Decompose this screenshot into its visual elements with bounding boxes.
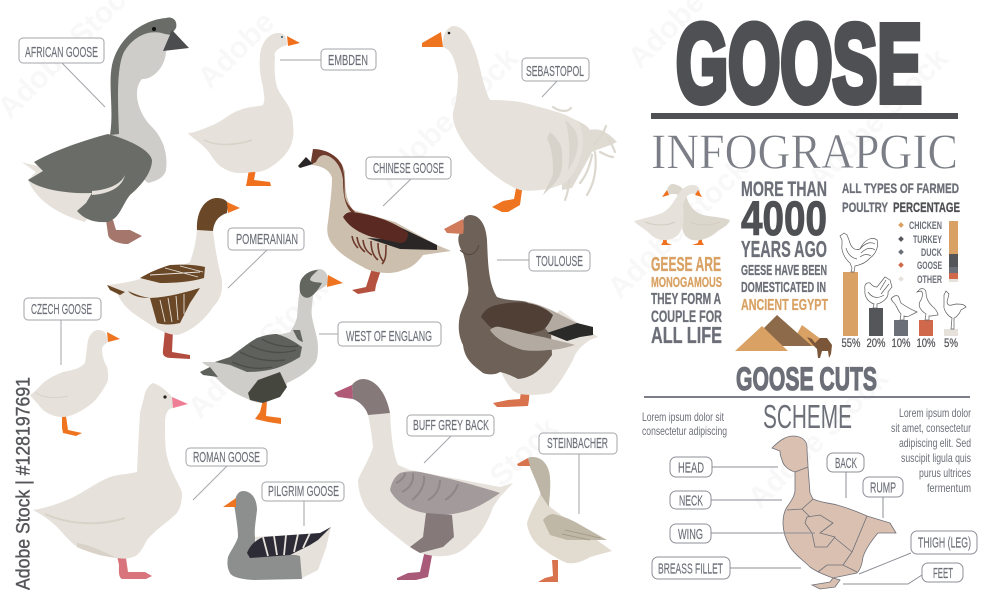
chart legend: OTHER [917,274,942,286]
text: more than 4000 years ago: DOMESTICATED IN [741,279,826,296]
text: more than 4000 years ago: ANCIENT EGYPT [741,297,828,314]
icon: pyramids and camel [735,315,832,358]
bar chart: poultry share: 55% [842,336,861,350]
label: Buff grey back [407,415,494,463]
section rule [644,396,970,398]
text: lorem right: suscipit ligula quis [901,451,971,465]
label: African goose [19,38,105,107]
label: Pilgrim goose: PILGRIM GOOSE [268,483,339,500]
callout: head: HEAD [678,460,704,476]
goose: Pomeranian [107,198,240,359]
text: lorem right: Lorem ipsum dolor [899,406,971,420]
label: Roman goose: ROMAN GOOSE [193,449,260,466]
label: Steinbacher [539,433,617,514]
callout: back: BACK [835,455,857,472]
chart legend [898,220,942,286]
text: more than 4000 years ago: MORE THAN [741,178,827,201]
label: Embden: EMBDEN [328,52,368,69]
callout: head [670,457,778,477]
goose: Steinbacher [517,457,612,582]
stock watermarks: Adobe Stock [182,272,335,425]
goose: Embden [188,33,300,186]
label: Chinese goose [366,157,451,206]
callout: breast fillet [652,557,801,579]
label: Pomeranian [228,228,304,288]
text: lorem right: purus ultrices [919,466,971,480]
goose: Toulouse [444,215,598,407]
bar chart: poultry share: 10% [892,336,911,350]
bar chart: poultry share: 20% [866,336,886,350]
text: lorem right [891,406,971,495]
label: Toulouse [497,250,590,271]
callouts: goose cuts [652,453,977,584]
text: geese are monogamous: GEESE ARE [651,254,721,276]
label: African goose: AFRICAN GOOSE [25,44,98,61]
text: more than 4000 years ago: GEESE HAVE BEEN [741,262,827,279]
text: lorem left: Lorem ipsum dolor sit [642,410,724,424]
icons: poultry line drawings [840,233,966,329]
text: more than 4000 years ago: YEARS AGO [741,236,827,262]
label: Chinese goose: CHINESE GOOSE [373,160,444,177]
text: lorem right: adipiscing elit. Sed [899,436,971,450]
heading: poultry percentage: PERCENTAGE [893,199,960,215]
bar chart: poultry share: 10% [916,336,936,350]
text: geese are monogamous: COUPLE FOR [651,307,722,326]
callout: feet [843,563,963,584]
text: lorem right: sit amet, consectetur [891,421,971,435]
label: Buff grey back: BUFF GREY BACK [413,417,489,434]
heading: goose cuts: GOOSE CUTS [736,361,877,397]
text: lorem right: fermentum [927,481,971,495]
goose: Sebastopol [422,26,617,212]
callout: wing [670,524,815,543]
label: Embden [280,49,376,70]
title rule [651,113,958,119]
text: lorem left [642,410,727,438]
icon: couple of geese [634,184,730,245]
callout: back [827,453,864,498]
diagram: goose cuts [772,436,896,589]
stacked bar [949,221,958,282]
label: Czech goose [24,298,101,365]
label: West of England: WEST OF ENGLANG [346,328,432,345]
callout: breast fillet: BREASS FILLET [658,560,723,578]
callout: feet: FEET [933,565,953,582]
bar chart: poultry share [842,272,958,350]
callout: rump: RUMP [870,480,896,496]
heading: poultry percentage: POULTRY [842,199,888,215]
bar chart: poultry share: 5% [944,336,958,350]
text: more than 4000 years ago [741,178,828,314]
text: geese are monogamous: MONOGAMOUS [651,275,722,291]
stock watermarks: Adobe [192,6,281,95]
chart legend: CHICKEN [909,220,942,232]
chart legend: TURKEY [913,234,942,246]
goose: West of England [200,269,343,424]
text: geese are monogamous [651,254,722,348]
goose: African goose [20,17,189,244]
text: geese are monogamous: ALL LIFE [651,322,722,348]
stock watermarks: Adobe Stock [742,362,895,515]
chart legend: DUCK [921,247,942,259]
label: West of England [319,322,441,346]
goose: Buff grey back [334,379,513,580]
goose: Chinese goose [298,149,451,294]
callout: neck: NECK [679,492,703,510]
goose: Czech goose [30,330,120,436]
label: Pilgrim goose [262,482,344,526]
heading: scheme: SCHEME [763,398,852,435]
label: Toulouse: TOULOUSE [536,253,583,270]
label: Sebastopol: SEBASTOPOL [526,63,584,80]
subtitle: infographic: INFOGRAPGIC [651,123,958,179]
label: Roman goose [186,448,267,500]
callout: thigh [859,531,977,574]
label: Sebastopol [522,58,589,97]
goose: Pilgrim goose [223,491,331,580]
stock id vertical text: Adobe Stock | #128197691 [14,377,34,590]
callout: wing: WING [678,526,703,543]
text: geese are monogamous: THEY FORM A [651,291,721,308]
chart legend: GOOSE [917,260,942,272]
callout: rump [863,477,903,518]
stock watermarks: Adobe Stock [372,42,525,195]
label: Steinbacher: STEINBACHER [547,435,608,452]
text: more than 4000 years ago: 4000 [741,193,827,246]
stock watermarks: Adobe Stock [802,42,955,195]
label: Pomeranian: POMERANIAN [236,231,298,248]
stock watermarks: Adobe Stock [602,152,755,305]
goose: Roman goose [33,383,188,579]
label: Czech goose: CZECH GOOSE [31,301,92,318]
text: lorem left: consectetur adipiscing [642,424,727,438]
stock watermarks: Adobe Stock [412,412,565,565]
callout: neck [670,491,782,510]
heading: poultry percentage [842,180,960,215]
